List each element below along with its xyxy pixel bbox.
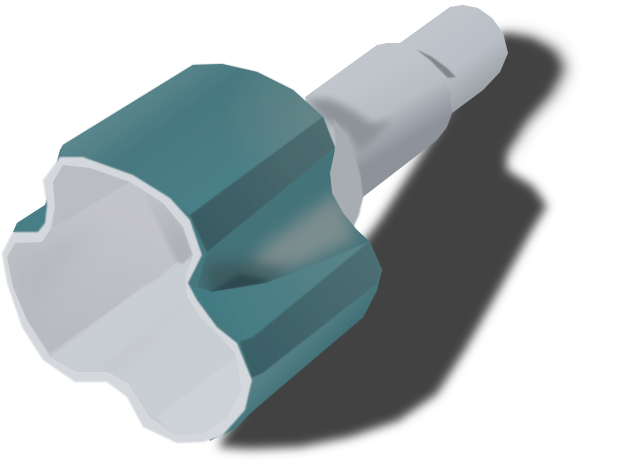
- body silhouette base: [13, 64, 382, 441]
- concave channel: [197, 150, 370, 296]
- channel base colour: [330, 150, 367, 240]
- top facet glow: [150, 64, 323, 215]
- translucent flange behind body: [328, 118, 363, 228]
- interior upper-left face: [53, 165, 130, 228]
- interior floor lighter facet: [157, 357, 241, 435]
- soft upper shadow lobe: [450, 36, 566, 170]
- stem: grey cylinder: [305, 5, 508, 228]
- upper dark chamfer: [190, 117, 335, 252]
- lower dark chamfer: [240, 242, 382, 378]
- main shadow mass: [218, 34, 558, 449]
- interior shading at left wall: [18, 225, 95, 310]
- interior base: [14, 171, 239, 434]
- cast shadow: [218, 34, 566, 449]
- top teal facet: [58, 64, 323, 215]
- lower lit facet: [190, 242, 369, 342]
- stem tip end: [400, 5, 508, 113]
- small teal left lobe: [13, 205, 50, 232]
- open end: rim and interior: [0, 157, 252, 443]
- interior floor shaded band: [98, 300, 190, 375]
- crescent groove on stem: [416, 49, 456, 78]
- interior right face: [157, 208, 192, 264]
- interior floor: [50, 255, 241, 435]
- bottom teal facet: [218, 284, 377, 438]
- white rim: [2, 157, 252, 443]
- channel dark crease: [212, 274, 267, 292]
- teal outer body: [13, 64, 382, 441]
- interior back face: [18, 298, 92, 352]
- stem collar body: [305, 5, 508, 227]
- interior: [0, 160, 250, 440]
- shadow on stem near body: [306, 99, 392, 152]
- channel grey highlight: [245, 190, 356, 278]
- channel soft shade: [205, 262, 290, 296]
